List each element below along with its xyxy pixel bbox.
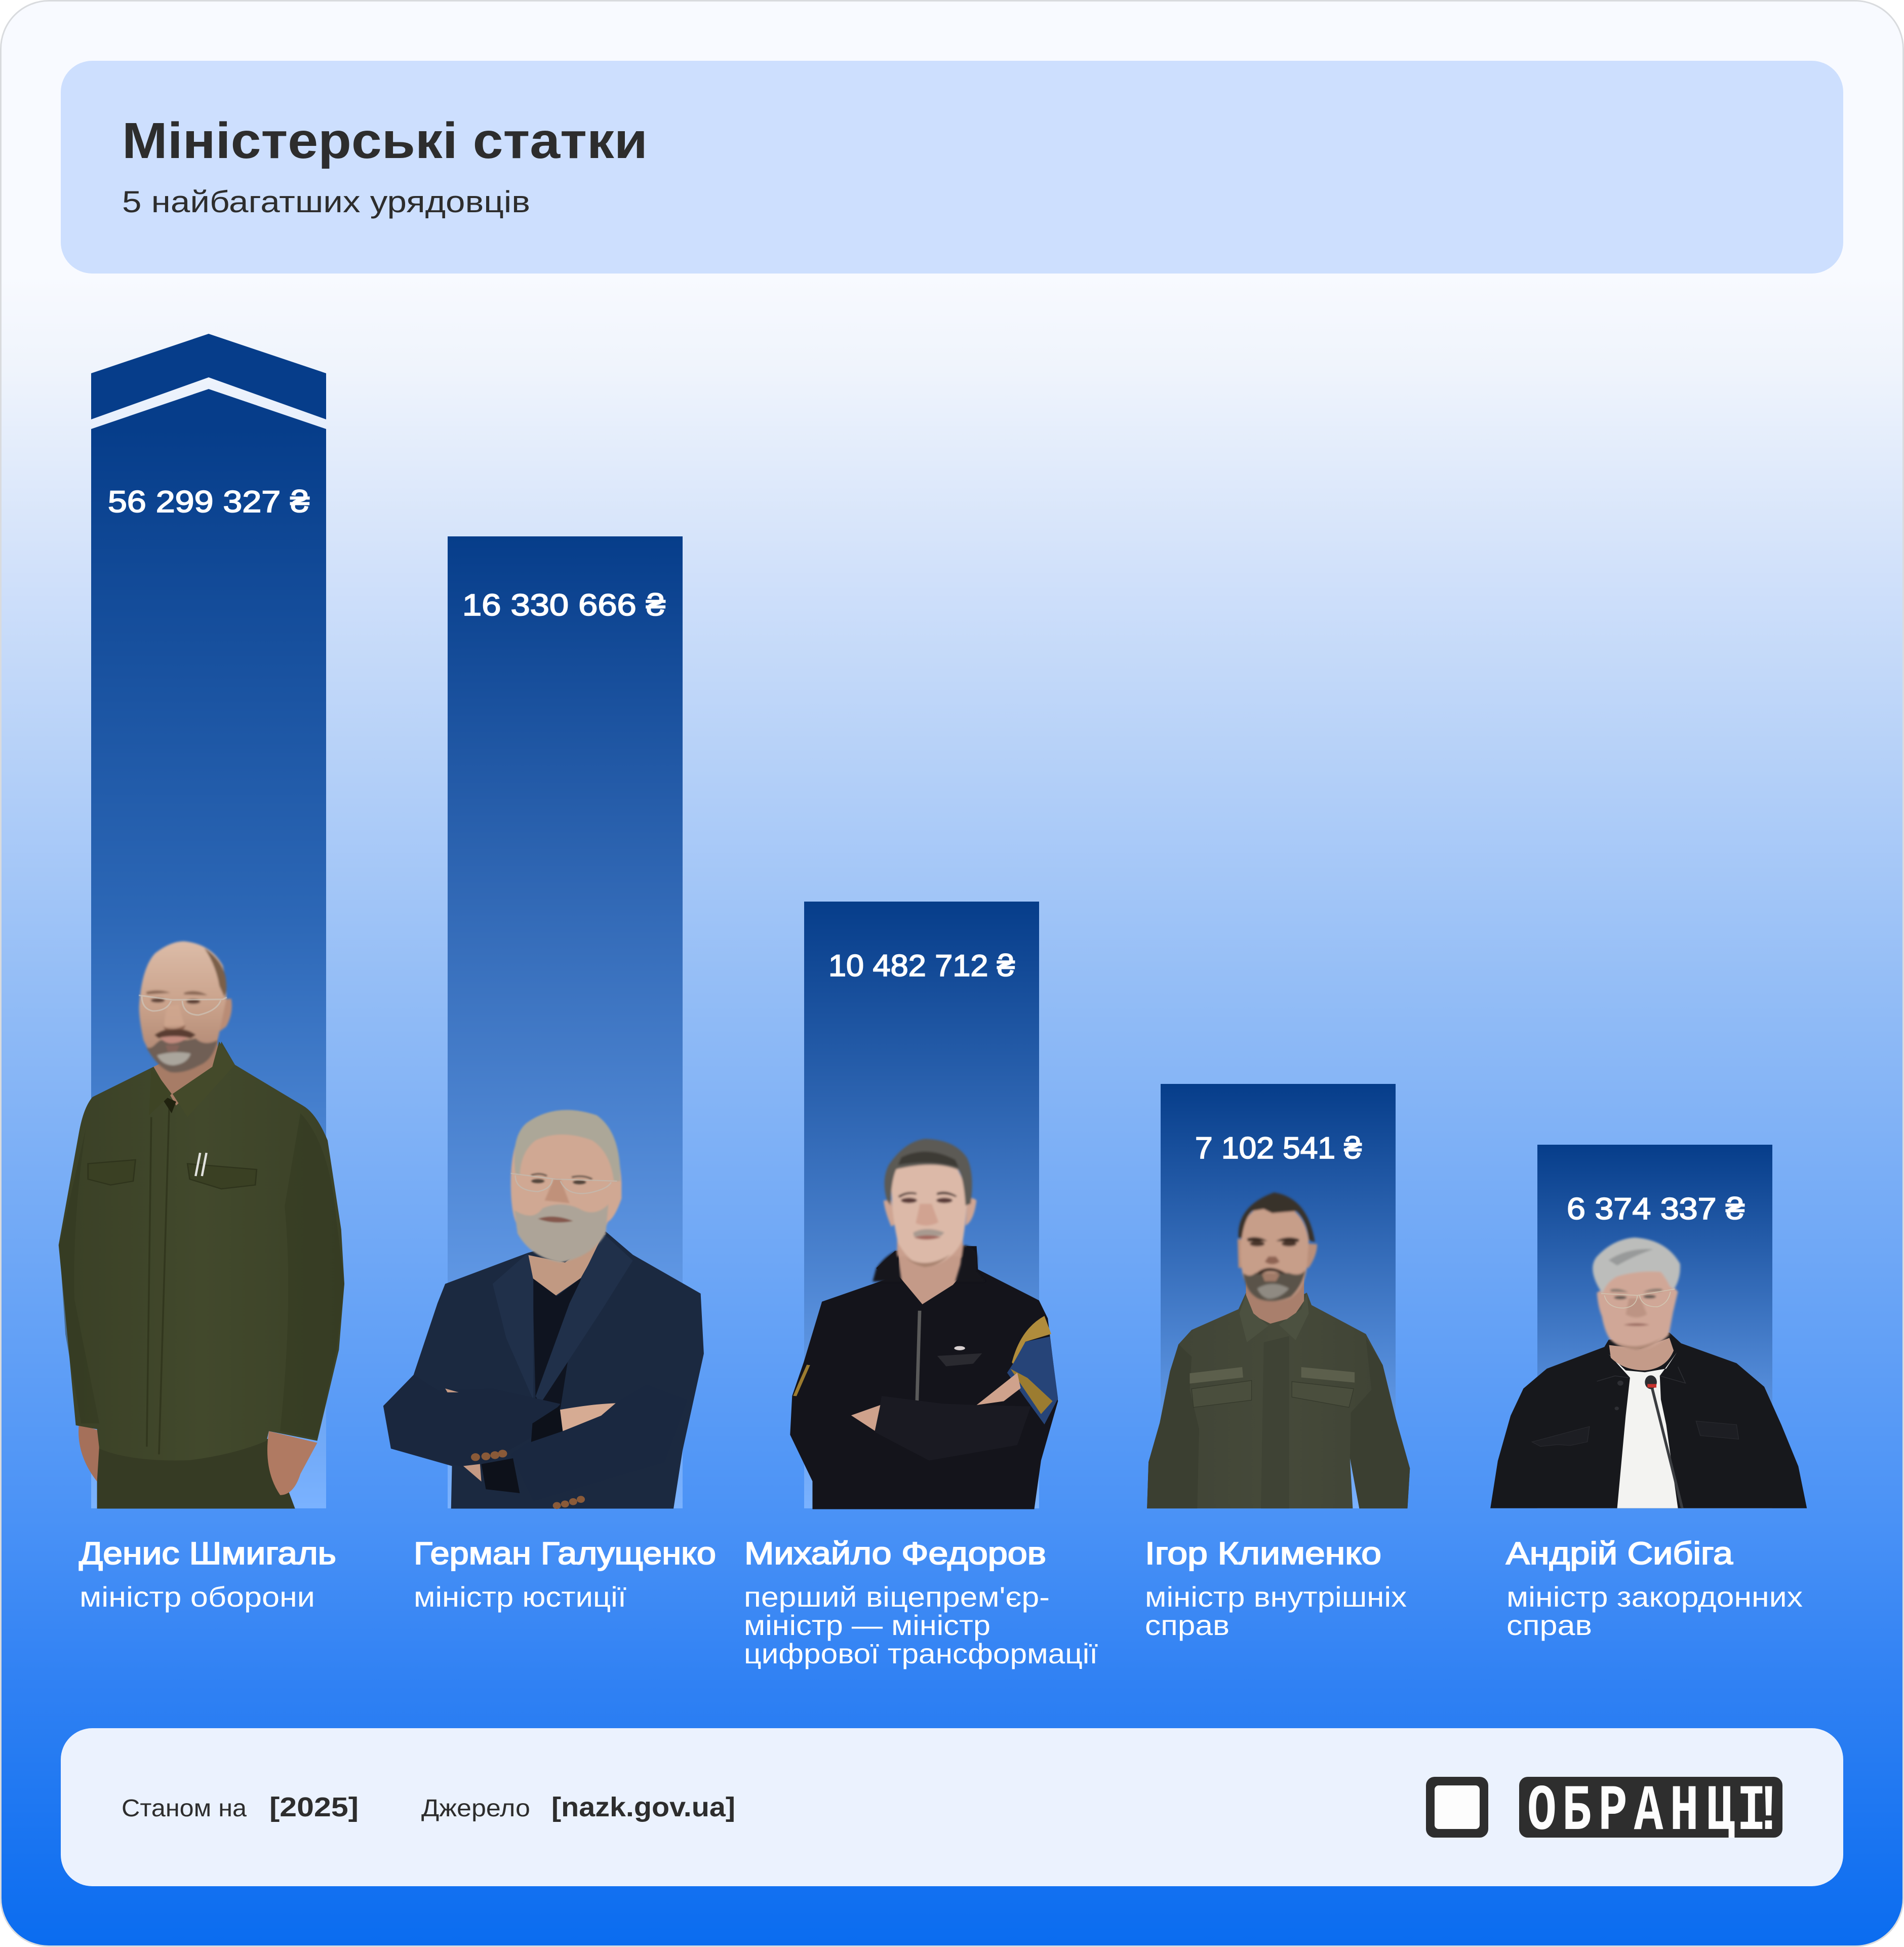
- glasses: [1601, 1289, 1675, 1308]
- label: Андрій Сибіга: Андрій Сибіга: [1506, 1536, 1733, 1571]
- bar: Клименко: [1161, 1084, 1396, 1508]
- value: 6 374 337 ₴: [1567, 1192, 1744, 1226]
- head: [1593, 1237, 1680, 1350]
- head: [872, 1139, 986, 1281]
- role: справ: [1145, 1609, 1229, 1641]
- bar: Шмигаль with overflow chevron: [91, 334, 326, 1508]
- portrait: Михайло Федоров: [790, 1139, 1058, 1509]
- label: Денис Шмигаль: [79, 1536, 336, 1613]
- role: [1145, 1581, 1407, 1641]
- bar: Сибіга: [1537, 1145, 1772, 1508]
- portrait: Ігор Клименко: [1147, 1192, 1410, 1508]
- source label: Джерело: [421, 1795, 530, 1822]
- glasses: [139, 995, 227, 1015]
- body: [59, 1036, 344, 1509]
- label: Ігор Клименко: Ігор Клименко: [1145, 1536, 1381, 1571]
- role: міністр закордонних: [1506, 1581, 1803, 1613]
- value: 10 482 712 ₴: [828, 949, 1015, 983]
- head: [1238, 1192, 1317, 1301]
- role: перший віцепрем'єр-: [744, 1581, 1050, 1613]
- date label: Станом на: [122, 1795, 247, 1822]
- source value: [nazk.gov.ua]: [551, 1792, 735, 1822]
- role: справ: [1506, 1609, 1592, 1641]
- label: Герман Галущенко: Герман Галущенко: [414, 1536, 716, 1571]
- role: міністр юстиції: [414, 1581, 626, 1613]
- bar: Федоров: [804, 902, 1039, 1508]
- body: [1147, 1272, 1410, 1508]
- logo mark: [1426, 1777, 1488, 1838]
- role: [1506, 1581, 1803, 1641]
- role: міністр оборони: [80, 1581, 315, 1613]
- role: цифрової трансформації: [744, 1638, 1098, 1669]
- panel: header: [61, 61, 1843, 274]
- panel: footer: [61, 1728, 1843, 1886]
- head: [139, 941, 232, 1072]
- role: міністр — міністр: [744, 1609, 990, 1641]
- subtitle: 5 найбагатших урядовців: [122, 185, 530, 219]
- body: [1490, 1333, 1807, 1508]
- label: Герман Галущенко: [414, 1536, 716, 1613]
- label: Михайло Федоров: Михайло Федоров: [744, 1536, 1046, 1571]
- label: Денис Шмигаль: Денис Шмигаль: [79, 1536, 336, 1571]
- portrait: Герман Галущенко: [383, 1110, 704, 1509]
- portrait: Денис Шмигаль: [59, 941, 344, 1509]
- label: Ігор Клименко: [1145, 1536, 1407, 1641]
- label: Андрій Сибіга: [1506, 1536, 1803, 1641]
- bar chart: [91, 334, 1772, 1508]
- portrait: Андрій Сибіга: [1490, 1237, 1807, 1508]
- title: Міністерські статки: [122, 112, 648, 169]
- value: 16 330 666 ₴: [462, 588, 665, 622]
- label: Михайло Федоров: [744, 1536, 1098, 1669]
- role: [744, 1581, 1098, 1669]
- value: 7 102 541 ₴: [1195, 1131, 1362, 1165]
- logo wordmark: ОБРАНЦІ!: [1527, 1775, 1783, 1848]
- value: 56 299 327 ₴: [108, 485, 309, 519]
- body: [790, 1246, 1058, 1509]
- bar: Галущенко: [448, 536, 683, 1508]
- role: міністр внутрішніх: [1145, 1581, 1407, 1613]
- date value: [2025]: [269, 1792, 359, 1822]
